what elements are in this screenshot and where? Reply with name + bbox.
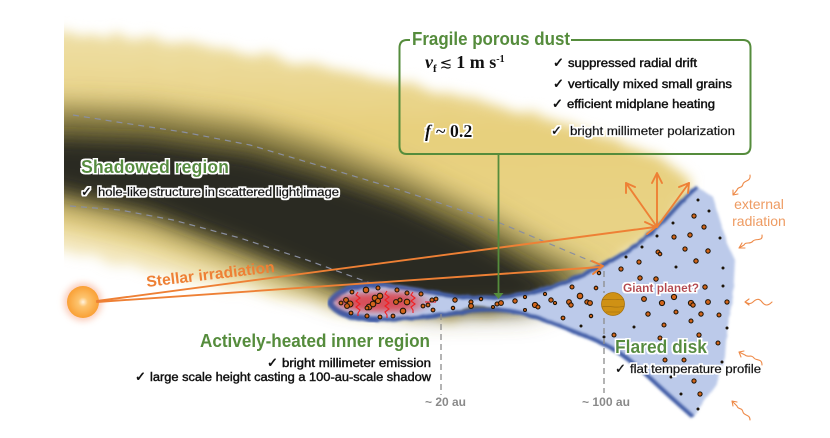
- list: dust properties: ✓: [552, 97, 563, 112]
- text block: actively-heated inner region: ✓: [267, 356, 278, 371]
- formula: fragmentation velocity: ≲: [440, 54, 452, 72]
- formula: fragmentation velocity: f: [433, 63, 437, 75]
- list: dust properties: ✓: [551, 124, 562, 139]
- heading: fragile porous dust: Fragile porous dust: [412, 29, 570, 49]
- formula: fragmentation velocity: 1 m s: [456, 52, 496, 72]
- icon: giant planet: [602, 292, 624, 316]
- text block: flared disk: [615, 337, 761, 377]
- formula: filling factor: f ~ 0.2: [425, 121, 472, 141]
- text block: shadowed region: ✓: [81, 185, 92, 200]
- list: dust properties: bright millimeter polarization: [570, 126, 735, 138]
- dashed shadow boundary lines: [70, 115, 600, 283]
- text block: shadowed region: [81, 157, 339, 200]
- label: 100 au: ~ 100 au: [582, 397, 630, 409]
- text block: flared disk: Flared disk: [615, 337, 708, 357]
- list: dust properties: [551, 56, 735, 139]
- scattered-light outer disk: yellow surface with dark shadow band: [64, 24, 698, 336]
- text block: shadowed region: Shadowed region: [81, 157, 229, 177]
- arrows: stellar irradiation rays: [97, 173, 689, 302]
- list: dust properties: ✓: [553, 77, 564, 92]
- label: stellar irradiation: Stellar irradiation: [145, 259, 276, 291]
- list: dust properties: vertically mixed small grains: [568, 79, 732, 91]
- distance markers: [441, 271, 604, 395]
- text block: actively-heated inner region: large scale height casting a 100-au-scale shadow: [150, 372, 432, 384]
- label: external radiation: external: [734, 196, 784, 212]
- formula: fragmentation velocity: -1: [496, 54, 505, 65]
- text block: actively-heated inner region: Actively-heated inner region: [200, 331, 430, 351]
- label: giant planet: Giant planet?: [623, 283, 699, 295]
- text block: actively-heated inner region: ✓: [135, 370, 146, 385]
- text block: flared disk: flat temperature profile: [630, 364, 761, 376]
- label: external radiation: [732, 196, 786, 229]
- text block: actively-heated inner region: [135, 331, 432, 385]
- text block: actively-heated inner region: bright millimeter emission: [282, 358, 431, 370]
- list: dust properties: suppressed radial drift: [568, 58, 698, 70]
- text block: flared disk: ✓: [615, 362, 626, 377]
- list: dust properties: ✓: [553, 56, 564, 71]
- formula: fragmentation velocity: v: [425, 52, 434, 72]
- icons: external radiation wiggly arrows: [732, 175, 772, 420]
- label: external radiation: radiation: [732, 213, 786, 229]
- text block: shadowed region: hole-like structure in scattered light image: [98, 187, 339, 199]
- arrow: link from dust box to midplane: [494, 154, 504, 299]
- flared disk midplane cross-section: [328, 187, 735, 417]
- panel: fragile porous dust: [400, 29, 750, 154]
- label: 20 au: ~ 20 au: [425, 397, 466, 409]
- heat wiggles in inner region: [356, 291, 436, 318]
- dust grains: [339, 214, 729, 396]
- list: dust properties: efficient midplane heating: [567, 99, 715, 111]
- small black grains: [580, 198, 728, 410]
- icon: central star: [64, 283, 102, 321]
